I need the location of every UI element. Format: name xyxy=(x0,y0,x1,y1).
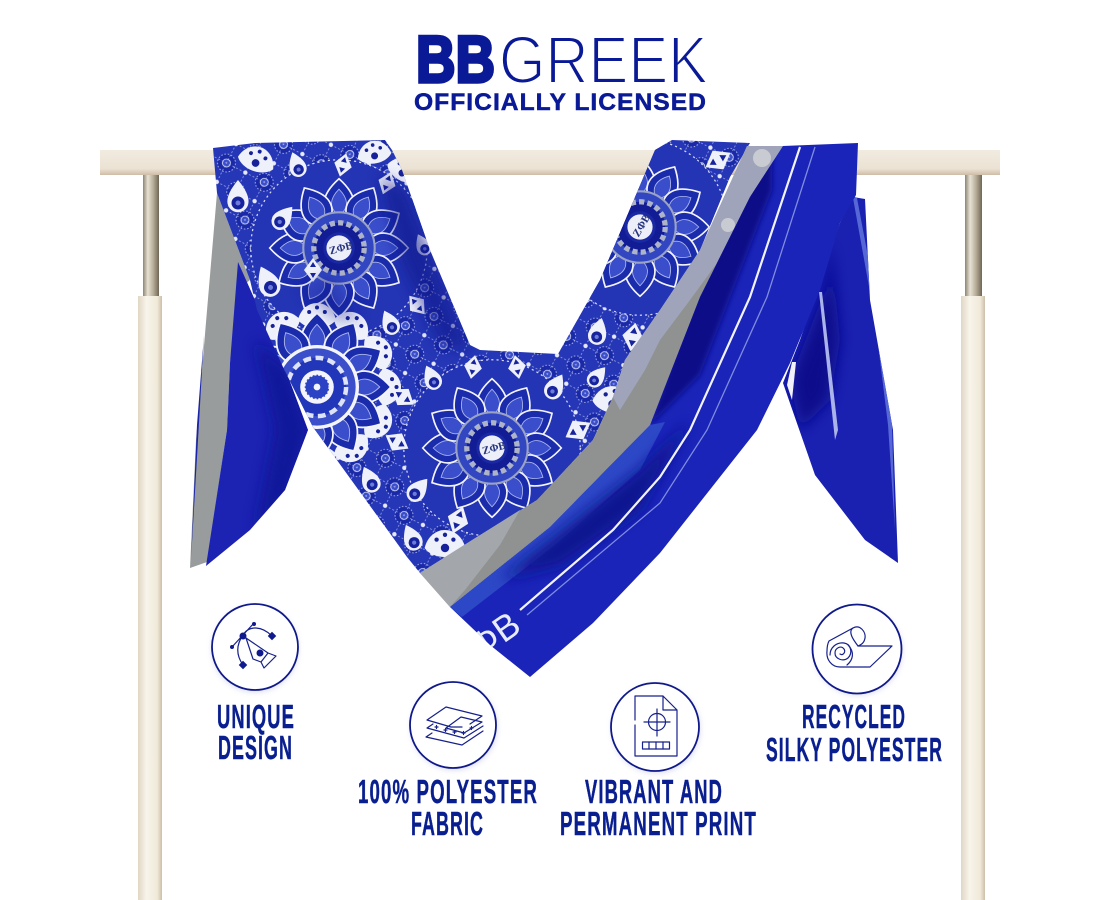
icon: print document xyxy=(611,683,700,773)
logo: officially licensed tagline: OFFICIALLY LICENSED xyxy=(414,89,707,116)
logo: BB mark: BB xyxy=(416,22,495,96)
left post xyxy=(138,175,162,900)
scarf: hem monogram: ΖΦB xyxy=(443,603,528,680)
scarf: grey stripe xyxy=(420,146,787,607)
label: unique design: UNIQUE xyxy=(217,698,295,735)
feature: unique design: DESIGN xyxy=(218,729,293,766)
scarf: right tail xyxy=(783,197,898,563)
feature: vibrant print xyxy=(560,683,757,842)
feature: vibrant print: PERMANENT PRINT xyxy=(560,805,757,842)
right post xyxy=(961,175,985,900)
feature: polyester fabric xyxy=(358,682,538,842)
label: vibrant and permanent print: VIBRANT AND xyxy=(585,773,723,810)
icon: fabric layers xyxy=(410,682,497,770)
logo xyxy=(414,22,708,116)
logo: GREEK wordmark: GREEK xyxy=(499,23,708,98)
scarf: mandala monograms: ΖΦB xyxy=(631,212,653,239)
scarf: patterned mandala panel xyxy=(200,130,760,590)
icon: fabric roll xyxy=(812,604,902,695)
scarf: mandala monograms: ΖΦB xyxy=(328,239,355,257)
hanging rail xyxy=(100,150,1000,175)
icon: pen tool xyxy=(212,604,298,692)
scarf: left tail xyxy=(190,193,310,568)
label: recycled silky polyester: RECYCLED xyxy=(802,698,906,735)
feature: unique design xyxy=(212,604,298,766)
label: 100% polyester fabric: 100% POLYESTER xyxy=(358,773,538,810)
scarf: mandala monograms xyxy=(328,212,653,457)
feature: polyester fabric: FABRIC xyxy=(411,805,484,842)
feature: recycled silky polyester xyxy=(766,604,943,768)
scarf: mandala monograms: ΖΦB xyxy=(481,439,508,457)
scarf xyxy=(190,130,898,690)
feature: recycled silky polyester: SILKY POLYESTER xyxy=(766,731,943,768)
stripe: bold white line xyxy=(520,147,800,610)
stripe: thin pale line xyxy=(527,147,815,615)
scarf: blue band with stripes xyxy=(440,130,870,690)
